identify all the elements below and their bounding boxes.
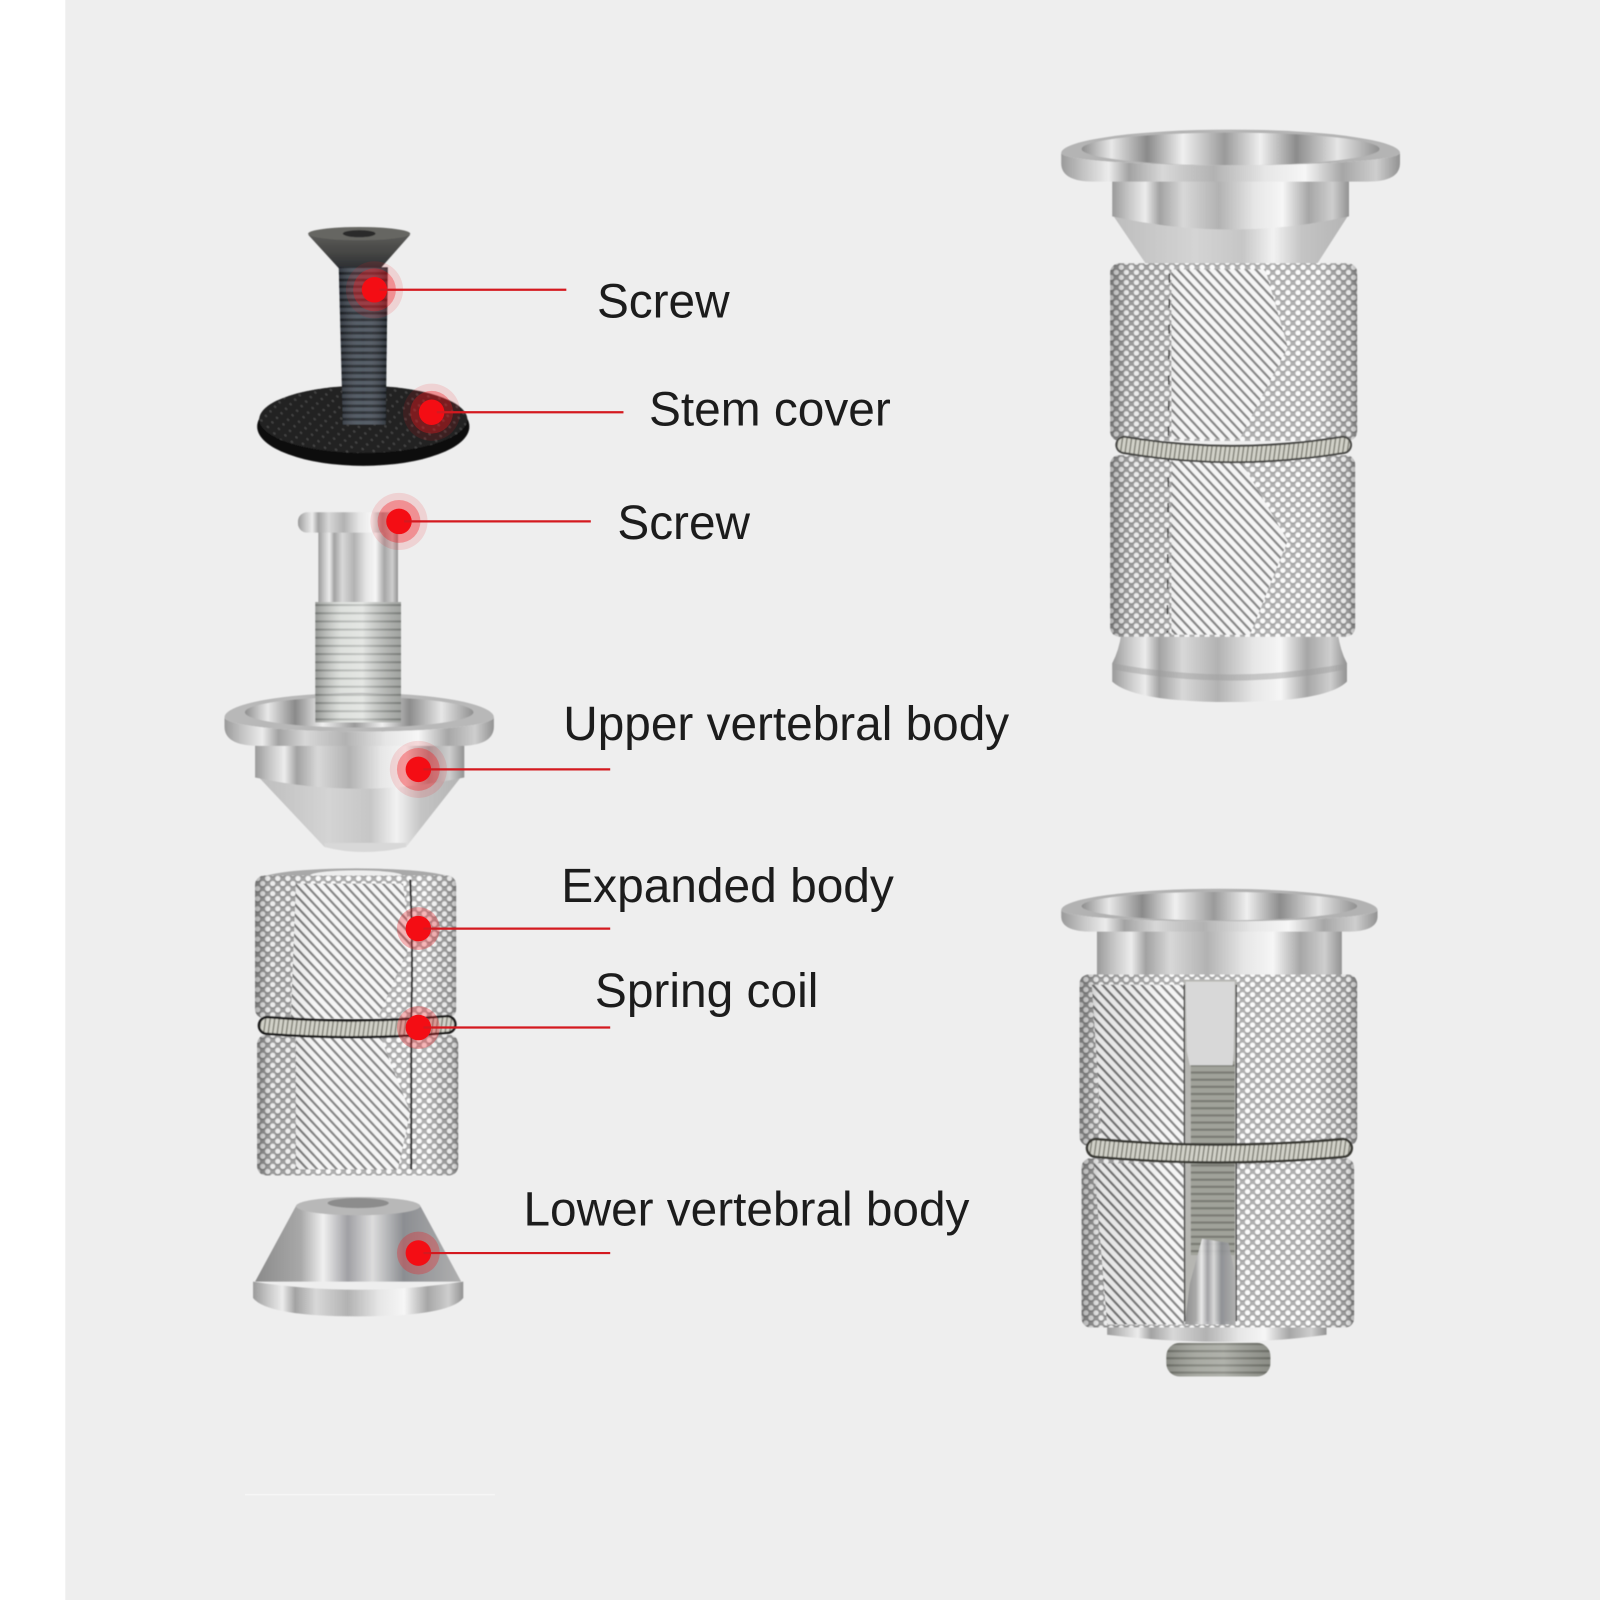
label: Screw second: Screw	[617, 497, 750, 550]
icon: stem cover disc	[257, 386, 469, 466]
label: Spring coil: Spring coil	[595, 965, 818, 1018]
callout: expanded body marker	[397, 907, 610, 950]
callout: bolt marker	[370, 493, 591, 550]
icon: lower vertebral body	[253, 1197, 463, 1316]
icon: assembled expander plug, slot view	[1061, 889, 1378, 1377]
label: Expanded body: Expanded body	[561, 860, 894, 913]
label: Lower vertebral body: Lower vertebral body	[523, 1184, 969, 1237]
label: Stem cover: Stem cover	[649, 384, 891, 437]
exploded parts view	[224, 227, 494, 1316]
icon: silver bolt shaft	[298, 512, 401, 720]
faint scan artifact	[245, 1494, 495, 1495]
label: Upper vertebral body: Upper vertebral body	[563, 698, 1009, 751]
callout: spring coil marker	[397, 1006, 610, 1049]
icon: black top screw	[308, 227, 410, 424]
callout: screw marker	[346, 261, 566, 318]
icon: upper vertebral body	[224, 693, 494, 852]
label: Screw: Screw	[597, 275, 730, 328]
icon: expanded body	[255, 868, 458, 1176]
callouts with red markers	[346, 261, 623, 1274]
callout: upper vertebral body marker	[390, 741, 610, 798]
callout: lower vertebral body marker	[397, 1232, 610, 1274]
icon: assembled expander plug, outside view	[1061, 130, 1400, 702]
callout: stem cover marker	[403, 384, 623, 441]
